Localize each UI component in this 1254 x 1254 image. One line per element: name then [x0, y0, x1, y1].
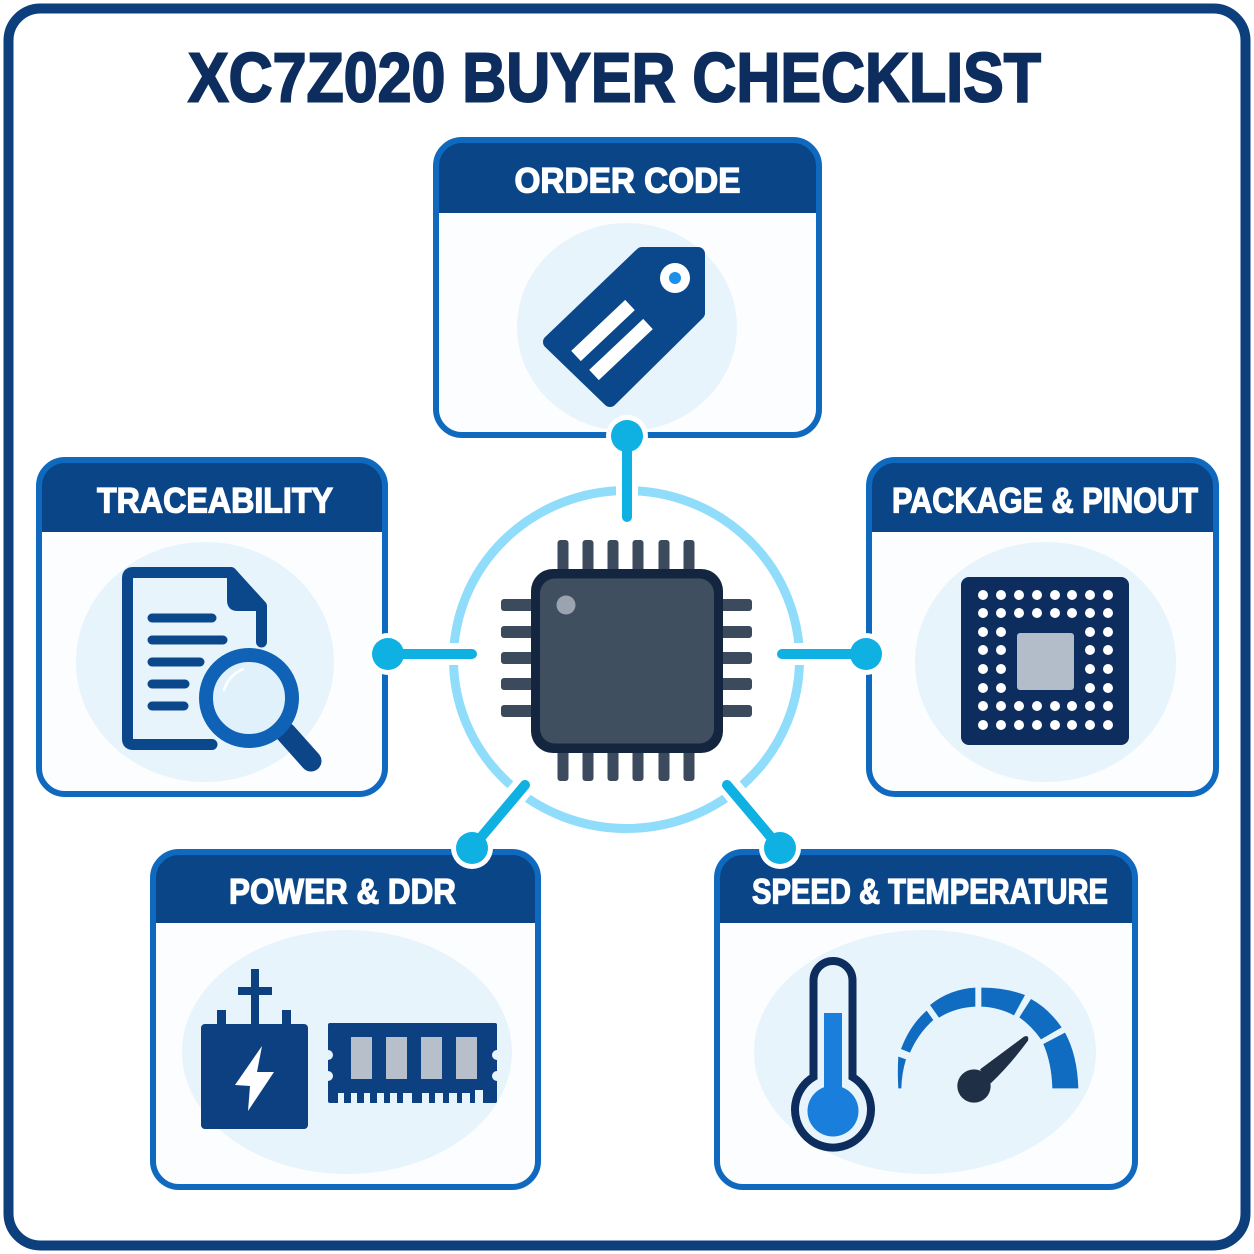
icon background: [517, 223, 737, 431]
icon: DDR memory module: [323, 1023, 502, 1103]
heading: order code: ORDER CODE: [514, 160, 740, 200]
connector: package and pinout: [777, 633, 887, 675]
panel: package and pinout: [869, 460, 1216, 794]
icon: speedometer: [898, 988, 1078, 1103]
icon background: [915, 542, 1176, 782]
icon: thermometer: [795, 961, 871, 1148]
connector: order code: [606, 415, 648, 522]
icon background: [76, 542, 334, 782]
connector: power and DDR: [451, 782, 527, 869]
panel: traceability: [39, 460, 385, 794]
connector: traceability: [367, 633, 477, 675]
center chip: [501, 540, 752, 781]
panel: power and DDR: [153, 852, 538, 1187]
title: XC7Z020 BUYER CHECKLIST: [188, 38, 1041, 116]
connector: speed and temperature: [726, 782, 801, 869]
center ring: [454, 490, 800, 828]
icon background: [754, 930, 1096, 1174]
icon: BGA package: [961, 577, 1129, 745]
icon: battery: [201, 969, 308, 1129]
heading: power and DDR: POWER & DDR: [229, 872, 456, 912]
icon: document with magnifier: [128, 570, 311, 761]
panel: order code: [436, 140, 819, 435]
heading: traceability: TRACEABILITY: [97, 480, 333, 520]
heading: speed and temperature: SPEED & TEMPERATURE: [752, 872, 1108, 912]
icon background: [182, 930, 512, 1174]
panel: speed and temperature: [717, 852, 1135, 1187]
icon: price tag: [550, 254, 698, 400]
heading: package and pinout: PACKAGE & PINOUT: [892, 480, 1198, 520]
